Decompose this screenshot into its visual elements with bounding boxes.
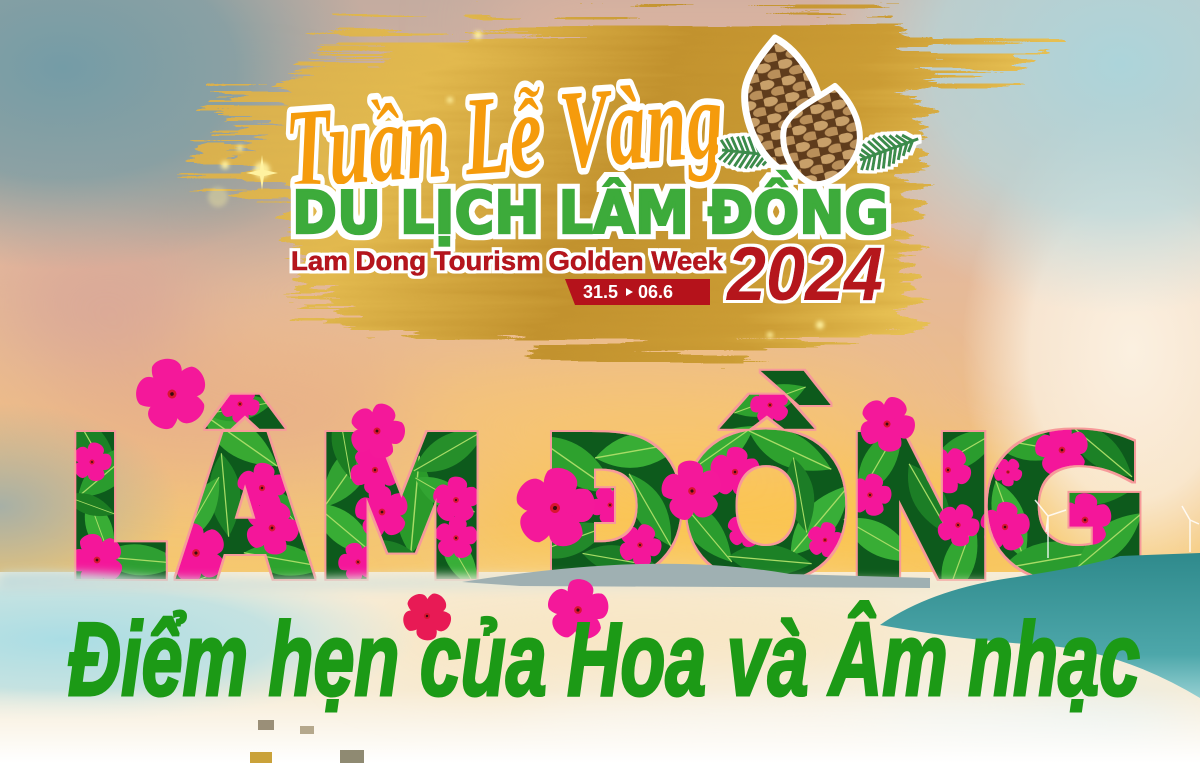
logo English subtitle: Lam Dong Tourism Golden Week: [291, 246, 724, 276]
cloud sea: [0, 572, 1200, 763]
date badge: [565, 279, 710, 305]
loose flowers: [127, 352, 927, 653]
date badge: 06.6: [638, 282, 673, 302]
village in clouds: [250, 720, 364, 763]
logo title: Tuần Lễ Vàng: Tuần Lễ Vàng: [282, 58, 727, 212]
main heading: Lâm Đồng filled with flowers: M: [315, 400, 488, 619]
main heading: Lâm Đồng filled with flowers: N: [846, 400, 996, 619]
main heading: Lâm Đồng filled with flowers: Â: [181, 400, 309, 619]
main heading: Lâm Đồng filled with flowers: Ồ: [682, 377, 850, 619]
logo heading: Du lịch Lâm Đồng: DU LỊCH LÂM ĐỒNG: [292, 171, 889, 247]
event logo: [282, 38, 924, 317]
gold brush stroke panel: [180, 20, 1050, 358]
pine cones with branches: [718, 38, 924, 184]
foreground cloud edge and distant hills: [0, 553, 1200, 698]
main heading: Lâm Đồng filled with flowers: G: [983, 400, 1149, 619]
year 2024: 2024: [725, 232, 883, 317]
date badge: 31.5: [583, 282, 618, 302]
sparkles: [208, 31, 824, 338]
wind turbines: [1035, 500, 1199, 558]
main heading: Lâm Đồng filled with flowers: Đ: [539, 400, 685, 619]
main heading: Lâm Đồng filled with flowers: L: [66, 400, 166, 619]
main heading: Lâm Đồng filled with flowers: [66, 377, 1149, 619]
